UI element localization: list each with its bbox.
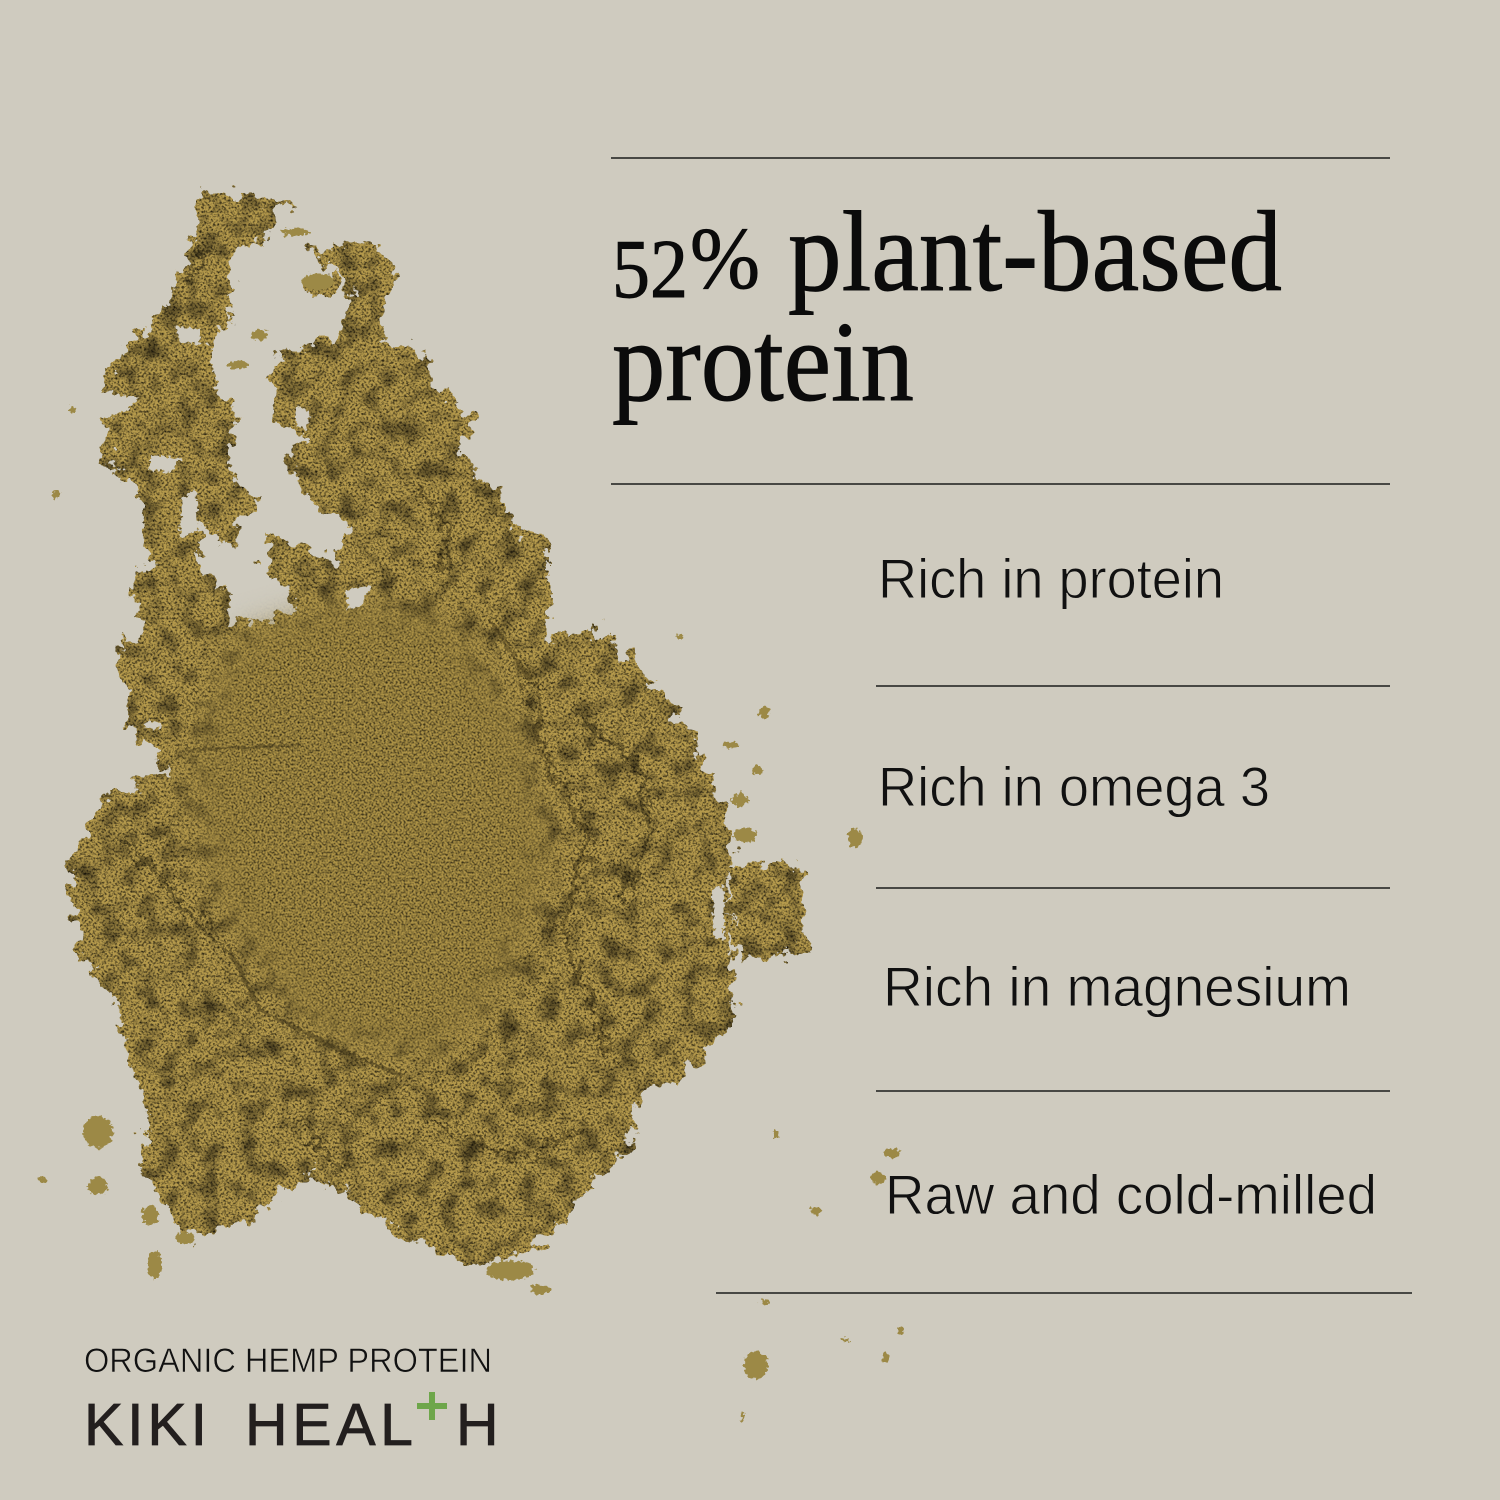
heading: 52% plant-based protein: 52 — [612, 223, 688, 316]
product label: ORGANIC HEMP PROTEIN — [84, 1342, 492, 1380]
benefit: rich in omega 3: Rich in omega 3 — [878, 755, 1270, 818]
heading: 52% plant-based protein: plant-based — [788, 188, 1282, 315]
benefit: rich in protein: Rich in protein — [878, 547, 1224, 610]
heading: 52% plant-based protein — [612, 188, 1282, 425]
brand logo: Kiki Health — [84, 1392, 499, 1458]
benefit: rich in magnesium: Rich in magnesium — [883, 955, 1351, 1018]
heading: 52% plant-based protein: % — [690, 211, 760, 308]
gaps in the powder — [100, 326, 724, 940]
brand logo: Kiki Health: H — [456, 1392, 499, 1458]
brand logo: Kiki Health: KIKI — [84, 1392, 207, 1458]
cracks over the centre — [185, 620, 540, 1075]
scattered powder crumbs — [38, 228, 904, 1420]
brand logo: Kiki Health: HEAL — [245, 1392, 413, 1458]
smooth centre of pile — [195, 610, 545, 1050]
powder pile image — [38, 190, 904, 1420]
benefit: raw and cold-milled: Raw and cold-milled — [885, 1163, 1377, 1226]
heading: 52% plant-based protein: protein — [612, 298, 914, 425]
